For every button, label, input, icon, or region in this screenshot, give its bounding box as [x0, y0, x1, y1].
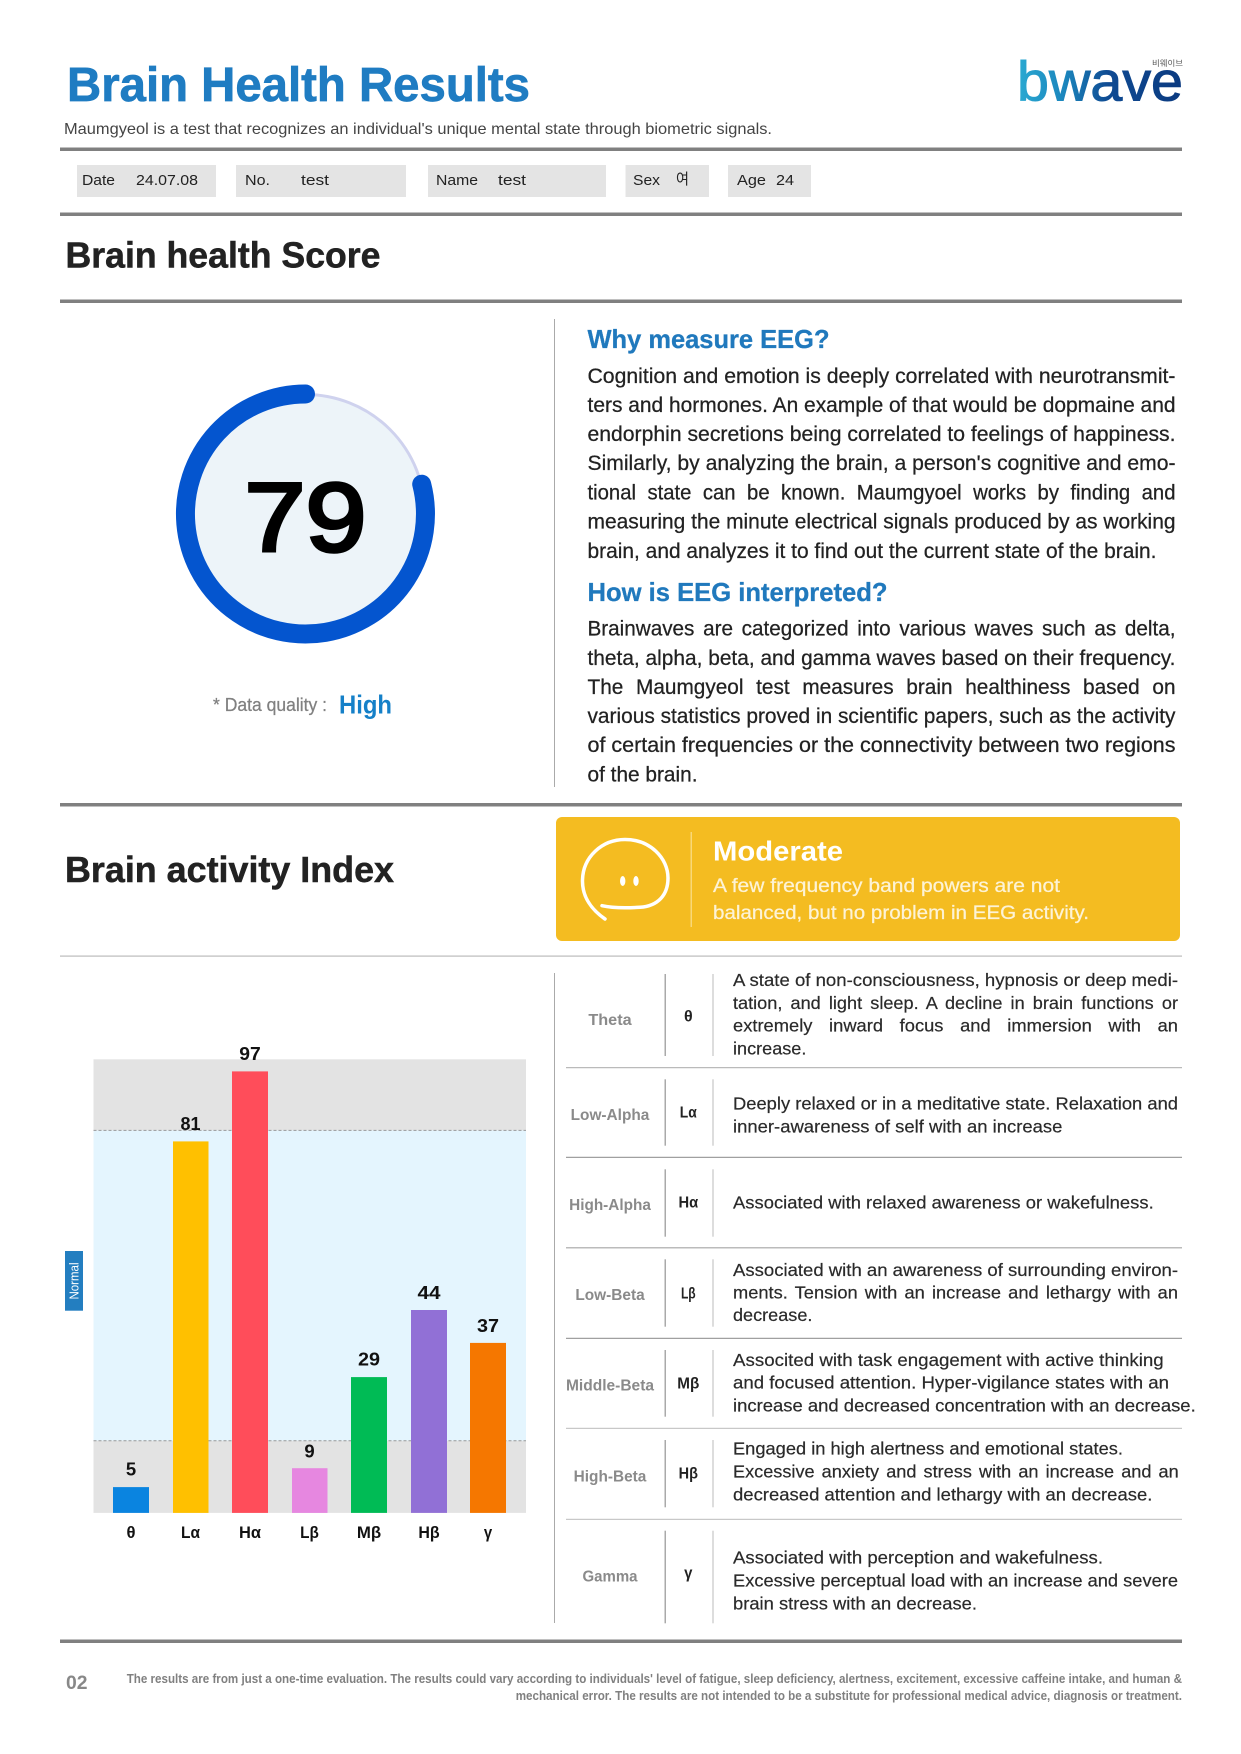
info: age: 24	[776, 172, 794, 189]
panel: score gauge	[185, 394, 425, 634]
row: theta: tation, and light sleep. A decline in brain functions or	[733, 993, 1178, 1013]
info: sex: 여	[676, 171, 689, 188]
logo: bwave: 비웨이브	[1152, 58, 1183, 68]
row: gamma: brain stress with an decrease.	[733, 1593, 977, 1613]
row: middle beta: and focused attention. Hyper-vigilance states with an	[733, 1373, 1169, 1393]
bar: middle beta: 29	[358, 1349, 380, 1370]
gauge progress arc 79%	[185, 394, 425, 634]
row: low beta: decrease.	[733, 1305, 812, 1325]
row: theta: A state of non-consciousness, hypnosis or deep medi-	[733, 970, 1178, 990]
paragraph: why measure EEG	[588, 365, 1176, 563]
bar: gamma: 37	[477, 1315, 499, 1336]
footer disclaimer	[127, 1672, 1182, 1703]
callout text: A few frequency band powers are not	[713, 876, 1061, 897]
bar: theta	[113, 1459, 149, 1542]
row: middle beta	[566, 1350, 1196, 1417]
info: name	[428, 165, 606, 197]
tag: normal range: Normal	[68, 1262, 82, 1300]
row: high alpha: Associated with relaxed awareness or wakefulness.	[733, 1193, 1154, 1213]
panel: why measure EEG	[588, 324, 1176, 563]
info: date: Date	[82, 172, 115, 189]
logo: bwave: bwave	[1017, 50, 1183, 112]
bar: high alpha: Hα	[239, 1523, 262, 1542]
paragraph: why measure EEG: Cognition and emotion is deeply correlated with neurotransmit-	[588, 365, 1176, 388]
bar: theta: 5	[126, 1459, 136, 1480]
bar: high beta: Hβ	[418, 1523, 440, 1542]
row: gamma	[582, 1531, 1178, 1623]
row: middle beta: Associted with task engagement with active thinking	[733, 1350, 1164, 1370]
info: name: test	[498, 172, 527, 189]
gauge disc	[187, 396, 424, 632]
row: low alpha: Low-Alpha	[571, 1107, 649, 1124]
info: number: No.	[245, 172, 270, 189]
row: gamma: Excessive perceptual load with an increase and severe	[733, 1570, 1178, 1590]
paragraph: how EEG is interpreted	[588, 618, 1176, 786]
row: low alpha: Lα	[680, 1104, 697, 1121]
bar: theta: θ	[126, 1523, 136, 1542]
heading: Brain activity Index: Brain activity Index	[65, 849, 394, 890]
row: middle beta: Middle-Beta	[566, 1378, 654, 1395]
paragraph: why measure EEG: tional state can be known. Maumgyoel works by finding and	[588, 482, 1176, 504]
row: high beta: High-Beta	[574, 1468, 646, 1485]
bar: low alpha: Lα	[181, 1523, 200, 1542]
footer disclaimer: The results are from just a one-time evaluation. The results could vary according to individuals' level of fatigue, sleep deficiency, alertness, excitement, excessive caffeine intake, and human &	[127, 1672, 1182, 1686]
heading: how EEG is interpreted: How is EEG interpreted?	[588, 577, 888, 607]
icon: neutral face	[582, 840, 668, 919]
data quality	[213, 690, 392, 720]
paragraph: how EEG is interpreted: of the brain.	[588, 764, 698, 786]
info: age: Age	[737, 172, 766, 189]
paragraph: why measure EEG: brain, and analyzes it to find out the current state of the brain.	[588, 540, 1156, 563]
bar: middle beta	[351, 1349, 387, 1542]
row: low beta: Low-Beta	[575, 1287, 645, 1304]
bar: low beta: 9	[304, 1440, 315, 1462]
row: gamma: γ	[684, 1565, 693, 1582]
page number: 02	[66, 1673, 88, 1694]
callout: moderate status	[556, 817, 1180, 941]
row: high beta: Engaged in high alertness and emotional states.	[733, 1439, 1123, 1459]
row: theta: Theta	[588, 1012, 632, 1029]
row: high beta: Hβ	[679, 1465, 698, 1482]
callout text	[713, 876, 1089, 924]
callout heading: Moderate	[713, 836, 843, 866]
data quality: High	[339, 690, 392, 720]
row: theta: increase.	[733, 1039, 806, 1059]
bar: high alpha	[232, 1043, 268, 1542]
info: name: Name	[436, 172, 478, 189]
bar: high beta	[411, 1282, 447, 1542]
row: middle beta: Mβ	[677, 1375, 700, 1392]
row: high beta: Excessive anxiety and stress with an increase and an	[733, 1461, 1179, 1481]
row: theta: extremely inward focus and immersion with an	[733, 1016, 1178, 1036]
row: high alpha: Hα	[678, 1194, 698, 1211]
info: number: test	[301, 172, 330, 189]
bar: high alpha: 97	[239, 1043, 261, 1064]
title: Brain Health Results	[67, 59, 530, 112]
info: date: 24.07.08	[136, 172, 198, 189]
heading: Brain health Score: Brain health Score	[66, 234, 380, 276]
row: low beta: ments. Tension with an increase and lethargy with an	[733, 1283, 1178, 1303]
info: sex	[626, 165, 709, 197]
chart background	[94, 1059, 526, 1513]
callout text: balanced, but no problem in EEG activity.	[713, 903, 1089, 924]
bar chart: brain activity	[65, 1043, 526, 1542]
gauge track	[186, 394, 425, 634]
paragraph: why measure EEG: ters and hormones. An example of that would be dopmaine and	[588, 394, 1176, 417]
paragraph: how EEG is interpreted: Brainwaves are categorized into various waves such as delta,	[588, 618, 1176, 640]
bar: gamma: γ	[484, 1523, 493, 1542]
paragraph: why measure EEG: Similarly, by analyzing the brain, a person's cognitive and emo-	[588, 452, 1176, 475]
row: low alpha: Deeply relaxed or in a meditative state. Relaxation and	[733, 1094, 1178, 1114]
bar: gamma	[470, 1315, 506, 1542]
paragraph: how EEG is interpreted: of certain frequencies or the connectivity between two regions	[588, 734, 1176, 757]
data quality: * Data quality :	[213, 694, 327, 715]
row: low beta: Lβ	[681, 1285, 696, 1302]
tag: normal range	[65, 1251, 83, 1311]
footer disclaimer: mechanical error. The results are not intended to be a substitute for professional medical advice, diagnosis or treatment.	[516, 1689, 1182, 1703]
paragraph: how EEG is interpreted: theta, alpha, beta, and gamma waves based on their frequency.	[588, 647, 1176, 670]
row: high alpha: High-Alpha	[569, 1197, 651, 1214]
row: gamma: Associated with perception and wakefulness.	[733, 1547, 1103, 1567]
row: high beta	[574, 1439, 1179, 1507]
bar: low alpha: 81	[180, 1113, 200, 1134]
row: low beta: Associated with an awareness of surrounding environ-	[733, 1260, 1178, 1280]
row: high alpha	[569, 1169, 1154, 1237]
info: date	[77, 165, 216, 197]
bar: low alpha	[173, 1113, 208, 1542]
bar: low beta	[292, 1440, 328, 1542]
row: high beta: decreased attention and lethargy with an decrease.	[733, 1484, 1152, 1504]
paragraph: why measure EEG: measuring the minute electrical signals produced by as working	[588, 510, 1176, 534]
patient info row	[77, 165, 811, 197]
paragraph: how EEG is interpreted: various statistics proved in scientific papers, such as the activity	[588, 705, 1176, 728]
bar: low beta: Lβ	[300, 1523, 319, 1542]
subtitle: Maumgyeol is a test that recognizes an individual's unique mental state through biometric signals.	[64, 121, 772, 138]
panel: how EEG is interpreted	[588, 577, 1176, 786]
row: theta	[588, 970, 1178, 1059]
heading: why measure EEG: Why measure EEG?	[588, 324, 830, 354]
row: low alpha: inner-awareness of self with an increase	[733, 1116, 1062, 1136]
row: low beta	[575, 1259, 1178, 1327]
row: middle beta: increase and decreased concentration with an decrease.	[733, 1396, 1196, 1416]
bar: middle beta: Mβ	[357, 1523, 381, 1542]
row: low alpha	[571, 1079, 1178, 1146]
info: sex: Sex	[633, 172, 661, 189]
row: theta: θ	[684, 1009, 693, 1026]
paragraph: why measure EEG: endorphin secretions being correlated to feelings of happiness.	[588, 423, 1176, 446]
row: gamma: Gamma	[582, 1569, 638, 1586]
info: number	[236, 165, 406, 197]
info: age	[728, 165, 811, 197]
score number: 79	[244, 463, 366, 572]
paragraph: how EEG is interpreted: The Maumgyeol test measures brain healthiness based on	[588, 676, 1176, 699]
table: frequency bands	[566, 970, 1196, 1623]
bar: high beta: 44	[418, 1282, 441, 1303]
